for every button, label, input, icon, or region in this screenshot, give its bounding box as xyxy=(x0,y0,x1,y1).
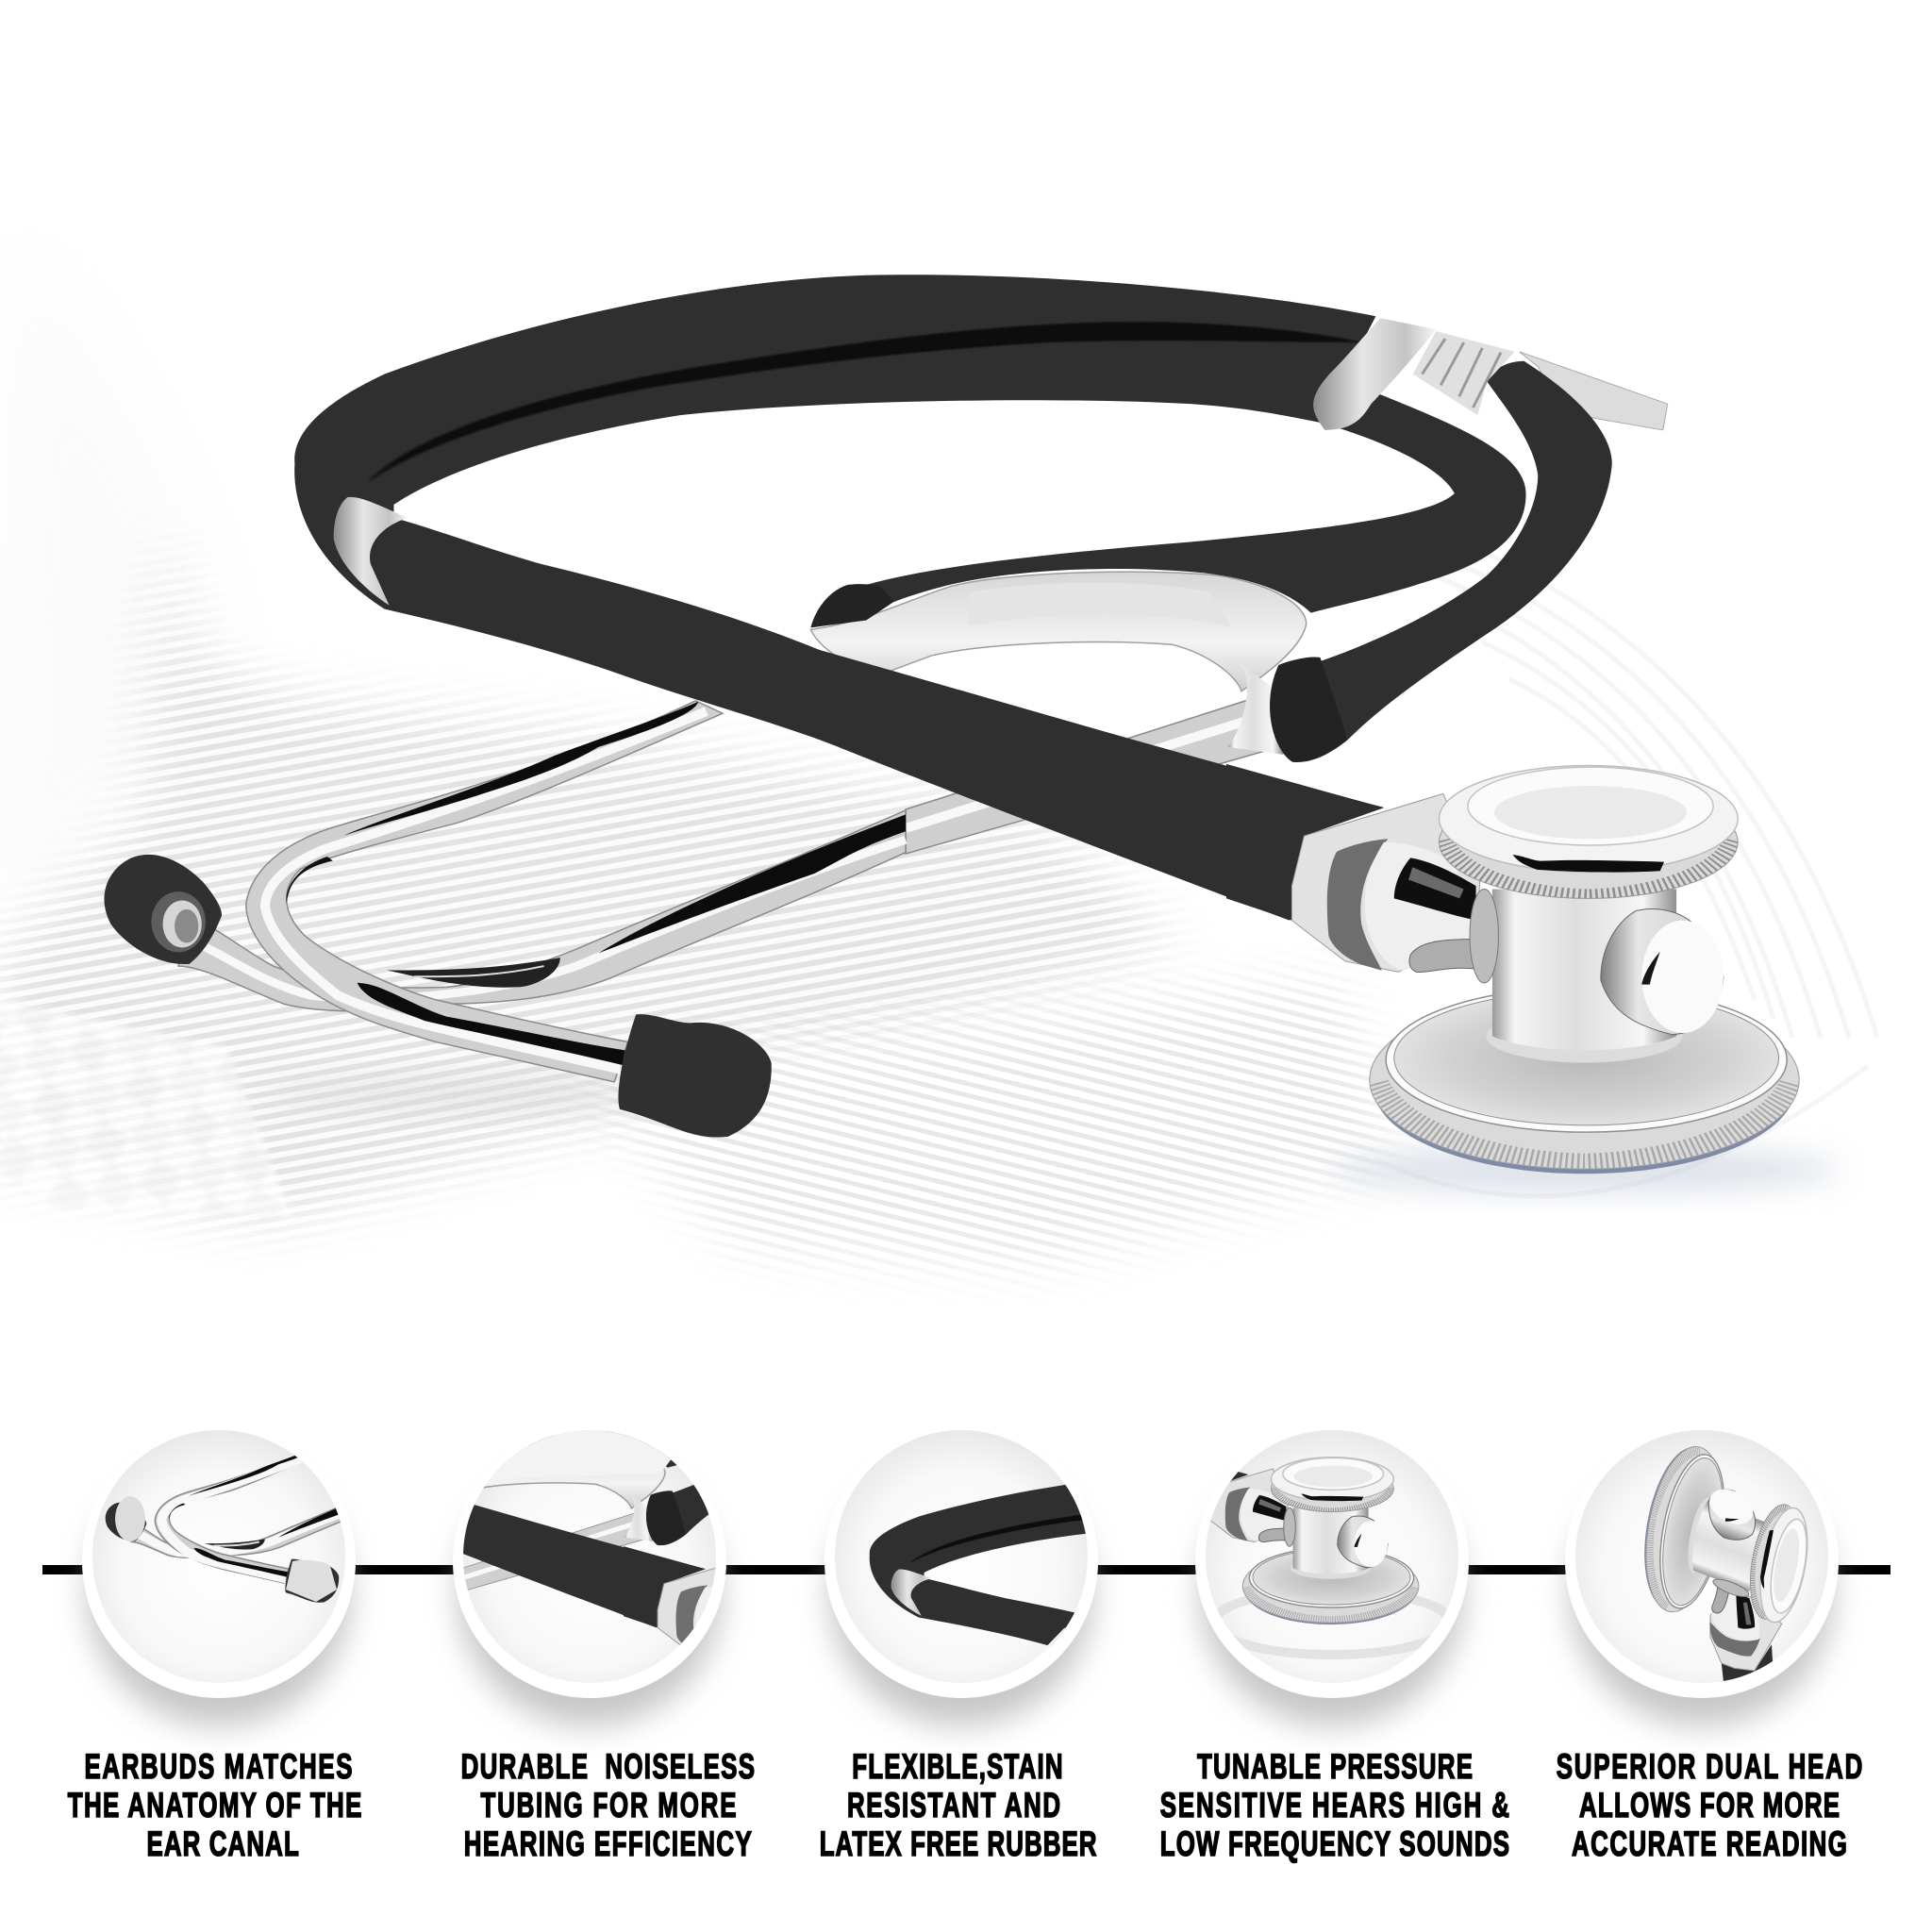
main stethoscope photo illustration xyxy=(104,275,1804,1174)
circle frame 5 xyxy=(1565,1424,1839,1698)
right ear tip xyxy=(618,1014,772,1138)
feature 2: tubing xyxy=(441,1430,738,1741)
black rubber tubing, spring and collars xyxy=(294,275,1668,921)
background wave pattern xyxy=(0,554,1879,1271)
caption 3: FLEXIBLE,STAIN xyxy=(852,1746,1063,1786)
caption 5 xyxy=(1557,1746,1862,1863)
thumbnail 3 xyxy=(835,1430,1088,1683)
small left collar xyxy=(334,497,408,606)
chest piece head xyxy=(1226,764,1804,1174)
caption 3 xyxy=(820,1746,1096,1863)
feature 1: earbuds xyxy=(71,1430,367,1741)
main tube loop and diagonal xyxy=(294,275,1384,921)
connector block xyxy=(1291,793,1480,972)
circle shadow 1 xyxy=(87,1462,351,1726)
caption 5: ACCURATE READING xyxy=(1572,1824,1847,1863)
caption 1: THE ANATOMY OF THE xyxy=(68,1785,361,1824)
feature 4: head xyxy=(1184,1424,1469,1726)
caption 5: ALLOWS FOR MORE xyxy=(1579,1785,1840,1824)
circle shadow 4 xyxy=(1200,1462,1464,1726)
feature 3: rubber bend xyxy=(813,1430,1109,1741)
chest clip xyxy=(1520,352,1668,430)
caption 1 xyxy=(68,1746,361,1863)
blue shadow under disc xyxy=(1374,1002,1795,1174)
large right collar xyxy=(1313,318,1436,430)
caption 2: HEARING EFFICIENCY xyxy=(464,1824,752,1863)
left ear tip xyxy=(104,855,222,964)
caption 1: EARBUDS MATCHES xyxy=(85,1746,352,1786)
tube groove xyxy=(368,322,1362,482)
caption 4: SENSITIVE HEARS HIGH & xyxy=(1160,1785,1509,1824)
divider line xyxy=(42,1565,1890,1574)
dial xyxy=(1440,786,1738,898)
circle frame 2 xyxy=(453,1424,726,1698)
caption 2: TUBING FOR MORE xyxy=(481,1785,736,1824)
caption 2 xyxy=(461,1746,755,1863)
second tube xyxy=(866,392,1526,613)
thumbnail 4 xyxy=(1184,1430,1458,1683)
caption 2: DURABLE NOISELESS xyxy=(461,1746,755,1786)
right fork cap xyxy=(1270,658,1348,762)
feature 5: dual head xyxy=(1565,1424,1839,1726)
circle frame 4 xyxy=(1195,1424,1469,1698)
headset spring xyxy=(810,572,1307,755)
chrome binaural arms and ear tips xyxy=(104,693,1285,1138)
side knob xyxy=(1601,909,1724,1035)
caption 4: LOW FREQUENCY SOUNDS xyxy=(1160,1824,1509,1863)
third tube xyxy=(1320,361,1612,740)
body cylinder xyxy=(1492,889,1676,1050)
circle frame 1 xyxy=(82,1424,356,1698)
thumbnail 5 xyxy=(1575,1430,1828,1710)
caption 3: RESISTANT AND xyxy=(847,1785,1060,1824)
left fork cap xyxy=(810,584,894,627)
tube end xyxy=(1226,764,1384,921)
caption 3: LATEX FREE RUBBER xyxy=(820,1824,1096,1863)
thumbnail 2 xyxy=(463,1430,716,1683)
base disc xyxy=(1370,991,1799,1169)
caption 4 xyxy=(1160,1746,1509,1863)
circle frame 3 xyxy=(824,1424,1098,1698)
circle shadow 3 xyxy=(829,1462,1093,1726)
caption 4: TUNABLE PRESSURE xyxy=(1197,1746,1473,1786)
caption 1: EAR CANAL xyxy=(147,1824,299,1863)
thumbnail 1 xyxy=(92,1430,345,1683)
circle shadow 2 xyxy=(458,1462,722,1726)
coil xyxy=(1413,331,1515,415)
circle shadow 5 xyxy=(1570,1462,1834,1726)
caption 5: SUPERIOR DUAL HEAD xyxy=(1557,1746,1862,1786)
